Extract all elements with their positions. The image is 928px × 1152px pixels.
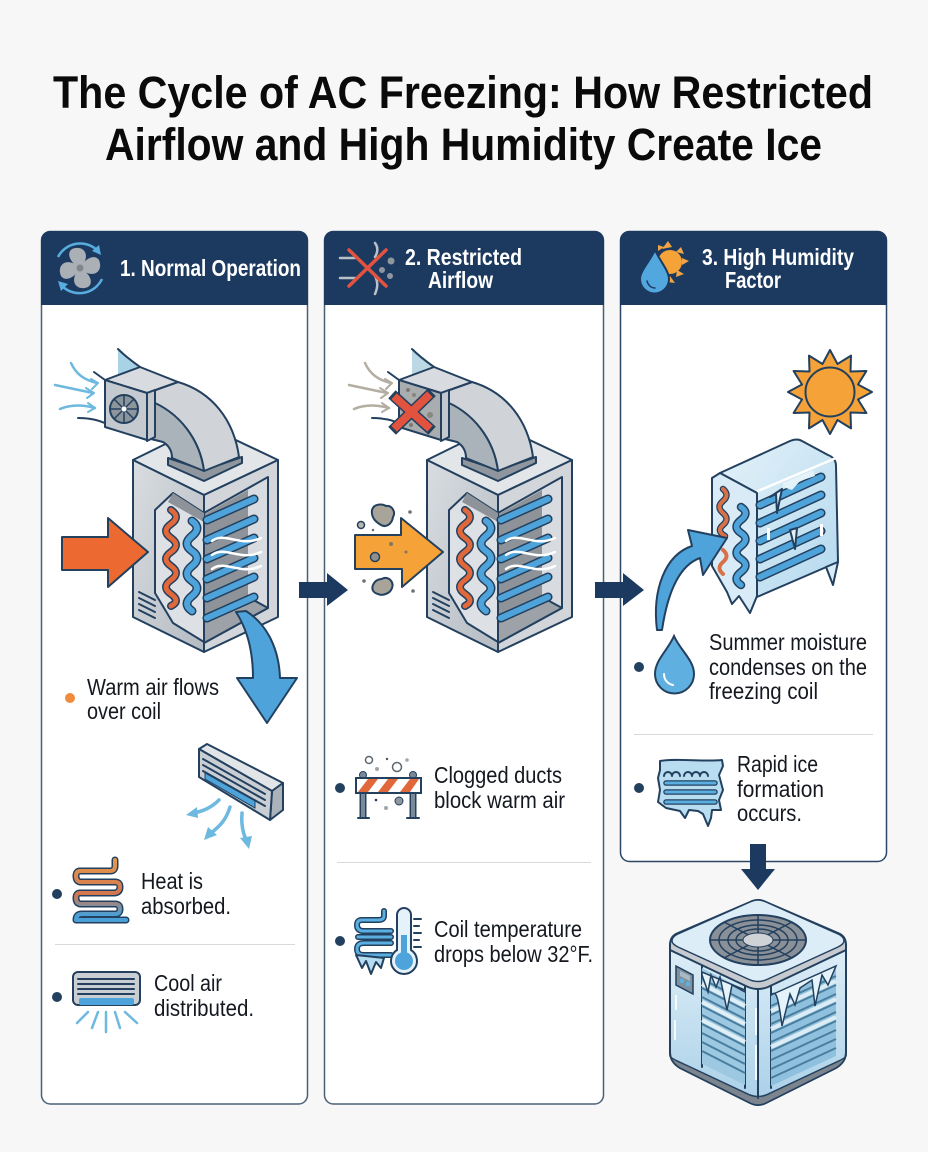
heading text: Factor <box>725 267 781 293</box>
bullet: clogged ducts: Clogged ducts <box>434 762 562 788</box>
icon: red X block <box>396 396 428 427</box>
bullet: coil temperature: drops below 32°F. <box>434 941 593 967</box>
top cover <box>670 900 846 989</box>
icon: sun <box>788 350 872 434</box>
title <box>53 67 873 170</box>
dirty intake air arrows <box>349 363 392 412</box>
panel: 1. Normal Operation <box>41 231 308 1104</box>
panel: 2. Restricted Airflow <box>324 231 604 1104</box>
arrow: warm air in <box>62 518 148 587</box>
heading text <box>702 244 854 293</box>
bullet: summer moisture: Summer moisture <box>709 629 867 655</box>
illustration: wall AC unit <box>186 744 283 849</box>
bullet: coil temperature: Coil temperature <box>434 916 582 942</box>
icon: iced coil <box>658 760 723 826</box>
arrow: moisture to coil <box>656 530 727 630</box>
left louvers <box>702 968 745 1085</box>
weak air waves <box>506 538 555 569</box>
bullet: rapid ice: Rapid ice <box>737 751 818 777</box>
arrow: step 2 to 3 <box>595 573 644 606</box>
bullet: clogged ducts: block warm air <box>434 787 565 813</box>
bullet: rapid ice: formation <box>737 776 824 802</box>
cool air arrows <box>186 800 252 849</box>
bullet: rapid ice: occurs. <box>737 800 802 826</box>
bullet: cool air: Cool air <box>154 970 222 996</box>
bullet: coil temperature <box>335 908 593 974</box>
icon: blocked airflow <box>340 243 394 294</box>
arrow: step 1 to 2 <box>299 573 348 606</box>
icon: water drop <box>655 636 694 694</box>
illustration: air handler with duct <box>55 349 278 652</box>
icon: fan with circular arrows <box>58 243 102 293</box>
bullet: heat absorbed: Heat is <box>141 868 203 894</box>
bullet: warm air: Warm air flows <box>87 674 219 700</box>
warm air waves <box>212 538 261 569</box>
heading text: 1. Normal Operation <box>120 255 301 281</box>
bullet: summer moisture <box>634 629 867 704</box>
heading text: 3. High Humidity <box>702 244 854 270</box>
right louvers <box>771 966 836 1086</box>
title: The Cycle of AC Freezing: How Restricted <box>53 67 873 118</box>
bullet: heat absorbed: absorbed. <box>141 893 231 919</box>
panel: 3. High Humidity Factor <box>620 231 887 862</box>
panel 3 header <box>620 231 887 305</box>
bullet: cool air <box>52 970 254 1032</box>
bullet: warm air: over coil <box>87 698 161 724</box>
panel 2 header <box>324 231 604 305</box>
icon: intake fan <box>110 395 138 423</box>
icon: frozen coil and thermometer <box>356 908 421 974</box>
illustration: clogged air handler <box>349 349 572 652</box>
title: Airflow and High Humidity Create Ice <box>105 119 822 170</box>
arrow: cool air out <box>236 611 297 723</box>
control panel <box>676 966 693 994</box>
icon: heat coil <box>76 860 126 920</box>
icon: cool air unit <box>73 972 140 1032</box>
arrow: weak warm air with debris <box>355 505 443 595</box>
heading text: 2. Restricted <box>405 244 522 270</box>
bullet: heat absorbed <box>52 860 231 920</box>
bullet: summer moisture: condenses on the <box>709 654 867 680</box>
bullet: cool air: distributed. <box>154 995 254 1021</box>
arrow: step 3 to frozen unit <box>741 844 775 890</box>
icon: road barrier <box>356 756 421 818</box>
bullet: summer moisture: freezing coil <box>709 678 818 704</box>
heading text <box>405 244 522 293</box>
illustration: frozen outdoor condenser <box>670 900 846 1105</box>
bullet: clogged ducts <box>335 756 565 818</box>
heading text: Airflow <box>428 267 493 293</box>
icon: sun and water drop <box>640 241 689 294</box>
intake air arrows <box>55 363 98 412</box>
bullet: rapid ice <box>634 751 824 826</box>
panel 1 header <box>41 231 308 305</box>
fan grille <box>710 915 806 965</box>
illustration: frozen coil <box>712 440 838 613</box>
bullet: warm air <box>65 674 219 724</box>
